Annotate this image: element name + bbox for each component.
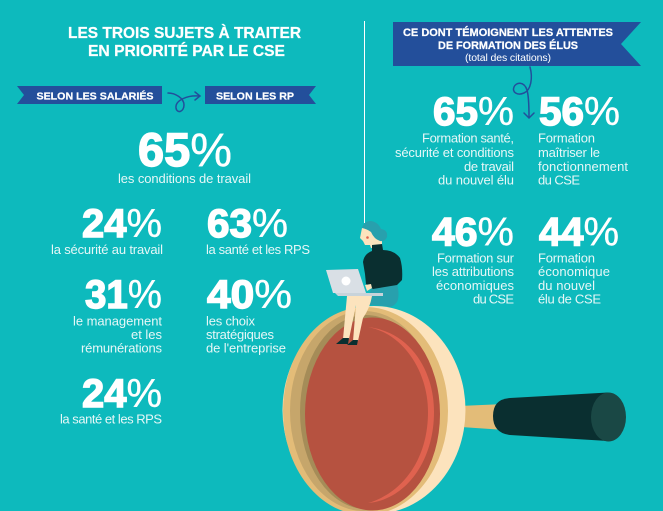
stat: 44% formation économique: du nouvel (538, 278, 595, 293)
neck and face (360, 226, 382, 248)
stat: 56% fonctionnement du CSE: fonctionnement (538, 159, 628, 174)
stat: 63% santé et RPS (206, 202, 310, 257)
stat: 65% formation santé: Formation santé, (422, 130, 514, 146)
arrow: salariés to RP (168, 92, 200, 112)
stat: 24% santé et RPS (60, 372, 162, 426)
stat: 65% formation santé: du nouvel élu (438, 172, 514, 188)
laptop base (335, 293, 383, 296)
title (68, 23, 301, 60)
lens glass (305, 318, 440, 510)
lens cream rim (282, 306, 466, 511)
handle grip (493, 392, 608, 441)
stat: 44% formation économique: Formation (538, 250, 595, 266)
stat: 46% attributions économiques: économiques (436, 278, 514, 293)
stat: 40% choix stratégiques: de l'entreprise (206, 340, 286, 356)
stat: 24% sécurité au travail (51, 202, 163, 257)
stat: 40% choix stratégiques: les choix (206, 314, 256, 328)
hand (365, 284, 372, 291)
stat: 44% formation économique: économique (538, 264, 610, 279)
stat: 46% attributions économiques (432, 210, 515, 306)
stat: 31% management (73, 273, 162, 356)
stat: 24% santé et RPS: la santé et les RPS (60, 412, 162, 426)
stat: 24% sécurité au travail: 24% (82, 202, 162, 246)
arrow: banner to stats (514, 67, 534, 118)
stat: 44% formation économique: élu de CSE (538, 292, 601, 306)
banner: selon les salariés (17, 86, 162, 104)
stat: 44% formation économique (538, 210, 619, 306)
stat: 40% choix stratégiques (206, 273, 292, 356)
stat: 65% formation santé: de travail (464, 159, 514, 174)
stat: 65% formation santé (395, 90, 514, 188)
lens olive inner rim (290, 311, 438, 511)
stat: 46% attributions économiques: 46% (432, 210, 514, 254)
stat: 65% conditions de travail: les conditions de travail (118, 171, 251, 186)
stat: 65% formation santé: sécurité et conditions (395, 145, 514, 160)
stat: 40% choix stratégiques: stratégiques (206, 327, 274, 342)
lens highlight (368, 327, 434, 503)
laptop logo (342, 276, 350, 286)
title: LES TROIS SUJETS À TRAITER (68, 23, 301, 42)
banner: attentes de formation (393, 22, 641, 66)
stat: 31% management: et les (131, 327, 162, 342)
stat: 44% formation économique: 44% (539, 210, 619, 254)
stat: 46% attributions économiques: les attributions (432, 264, 514, 279)
stat: 56% fonctionnement du CSE: maîtriser le (538, 145, 600, 160)
handle end cap (591, 392, 626, 442)
stat: 56% fonctionnement du CSE: du CSE (538, 172, 580, 188)
stat: 46% attributions économiques: du CSE (473, 292, 514, 306)
stat: 24% sécurité au travail: la sécurité au travail (51, 242, 163, 257)
icon: magnifying glass (282, 306, 626, 511)
stat: 40% choix stratégiques: 40% (207, 273, 292, 317)
stat: 31% management: le management (73, 314, 162, 328)
vertical divider (364, 21, 365, 223)
stat: 31% management: 31% (85, 273, 162, 317)
hair (362, 221, 387, 241)
stat: 65% conditions de travail: 65% (138, 123, 232, 176)
stat: 63% santé et RPS: la santé et les RPS (206, 242, 310, 257)
banner: attentes de formation: CE DONT TÉMOIGNENT LES ATTENTES (403, 26, 613, 39)
shoes (336, 338, 349, 344)
stat: 31% management: rémunérations (81, 340, 162, 356)
stat: 65% formation santé: 65% (433, 90, 514, 134)
handle neck (452, 404, 505, 430)
torso (363, 244, 402, 289)
skirt (366, 283, 398, 307)
stat: 24% santé et RPS: 24% (82, 372, 162, 416)
banner: attentes de formation: (total des citations) (465, 52, 551, 64)
banner: selon les RP: SELON LES RP (216, 90, 294, 102)
banner: selon les salariés: SELON LES SALARIÉS (36, 90, 154, 102)
lens shadow (300, 315, 432, 509)
stat: 65% conditions de travail (118, 123, 251, 186)
legs (343, 296, 372, 341)
icon: woman with laptop (326, 221, 402, 345)
stat: 56% fonctionnement du CSE (538, 90, 628, 188)
banner: selon les RP (205, 86, 316, 104)
stat: 63% santé et RPS: 63% (207, 202, 288, 246)
stat: 56% fonctionnement du CSE: 56% (539, 90, 620, 134)
title: EN PRIORITÉ PAR LE CSE (88, 41, 285, 60)
lens gold rim (283, 307, 448, 511)
stat: 56% fonctionnement du CSE: Formation (538, 130, 595, 146)
stat: 46% attributions économiques: Formation sur (437, 250, 515, 266)
laptop (326, 269, 366, 293)
banner: attentes de formation: DE FORMATION DES ÉLUS (438, 39, 578, 52)
cheek (366, 236, 369, 239)
